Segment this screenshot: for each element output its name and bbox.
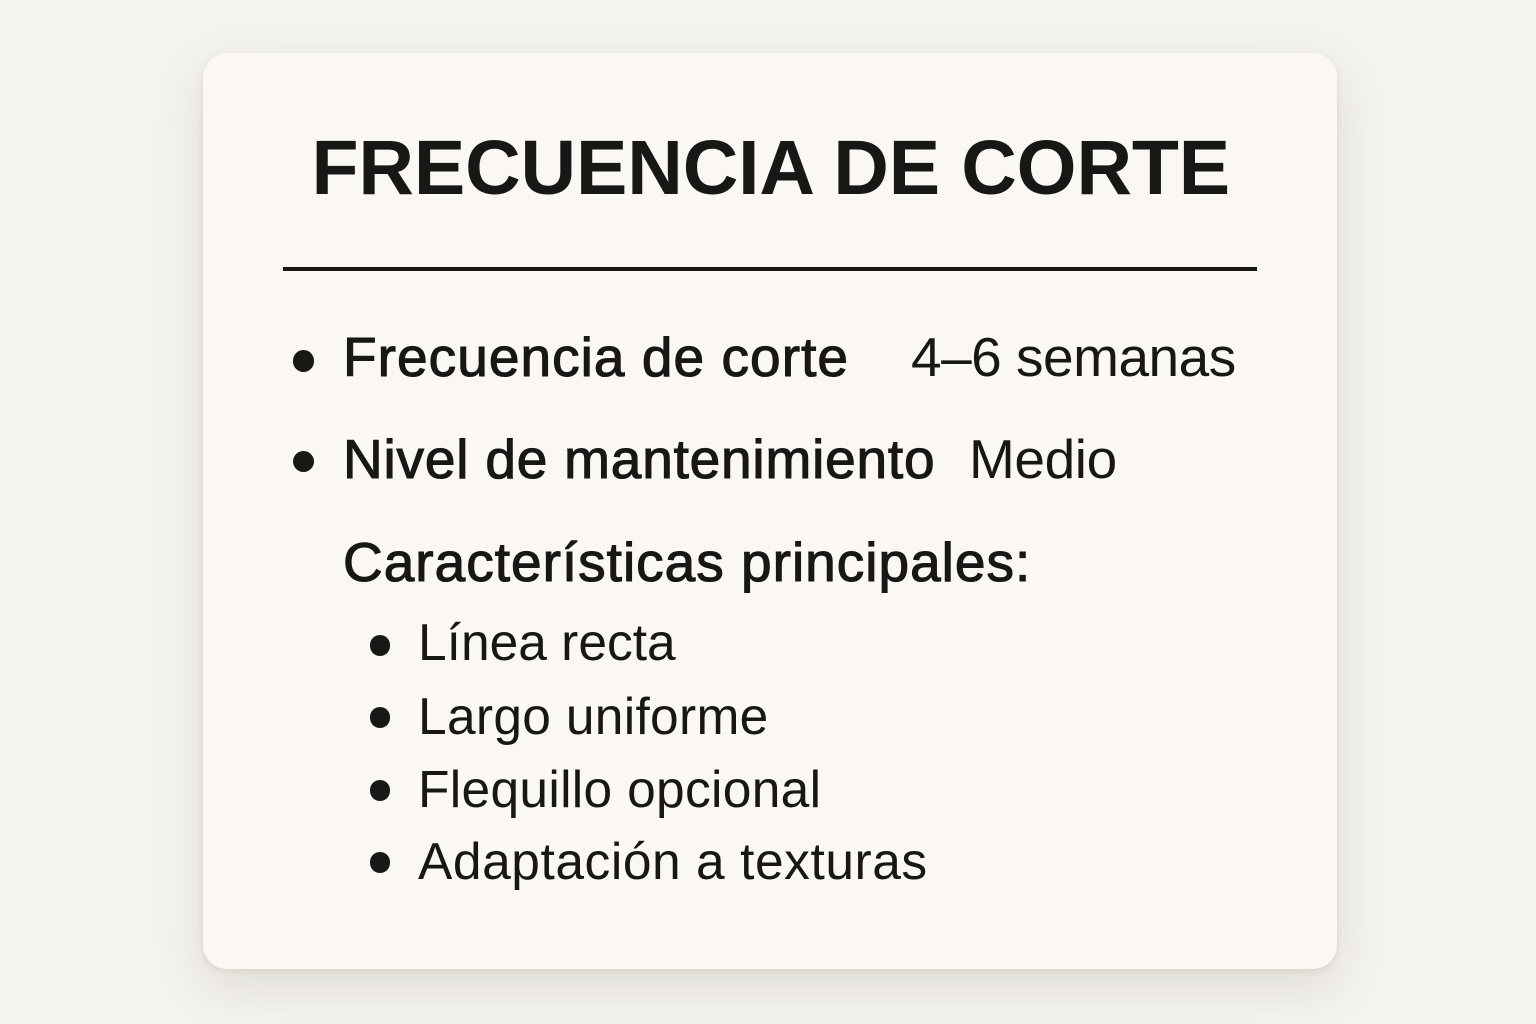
value: Medio bbox=[969, 428, 1117, 490]
bullet bbox=[370, 780, 390, 801]
panel: card bbox=[203, 53, 1337, 969]
feature: Adaptación a texturas bbox=[418, 832, 928, 890]
bullet bbox=[370, 635, 390, 656]
label: Frecuencia de corte bbox=[343, 326, 849, 388]
value: 4–6 semanas bbox=[911, 326, 1236, 388]
list item: frecuencia de corte bbox=[293, 326, 1236, 388]
bullet bbox=[370, 852, 390, 873]
bullet bbox=[292, 350, 314, 372]
title: FRECUENCIA DE CORTE bbox=[312, 125, 1230, 211]
list item: nivel de mantenimiento bbox=[293, 428, 1117, 490]
bullet bbox=[292, 450, 314, 472]
sublist: features bbox=[370, 613, 928, 890]
subheading: Características principales: bbox=[343, 531, 1031, 593]
label: Nivel de mantenimiento bbox=[343, 428, 935, 490]
bullet bbox=[370, 707, 390, 728]
feature: Largo uniforme bbox=[418, 686, 769, 744]
feature: Línea recta bbox=[418, 613, 676, 671]
feature: Flequillo opcional bbox=[418, 760, 821, 818]
